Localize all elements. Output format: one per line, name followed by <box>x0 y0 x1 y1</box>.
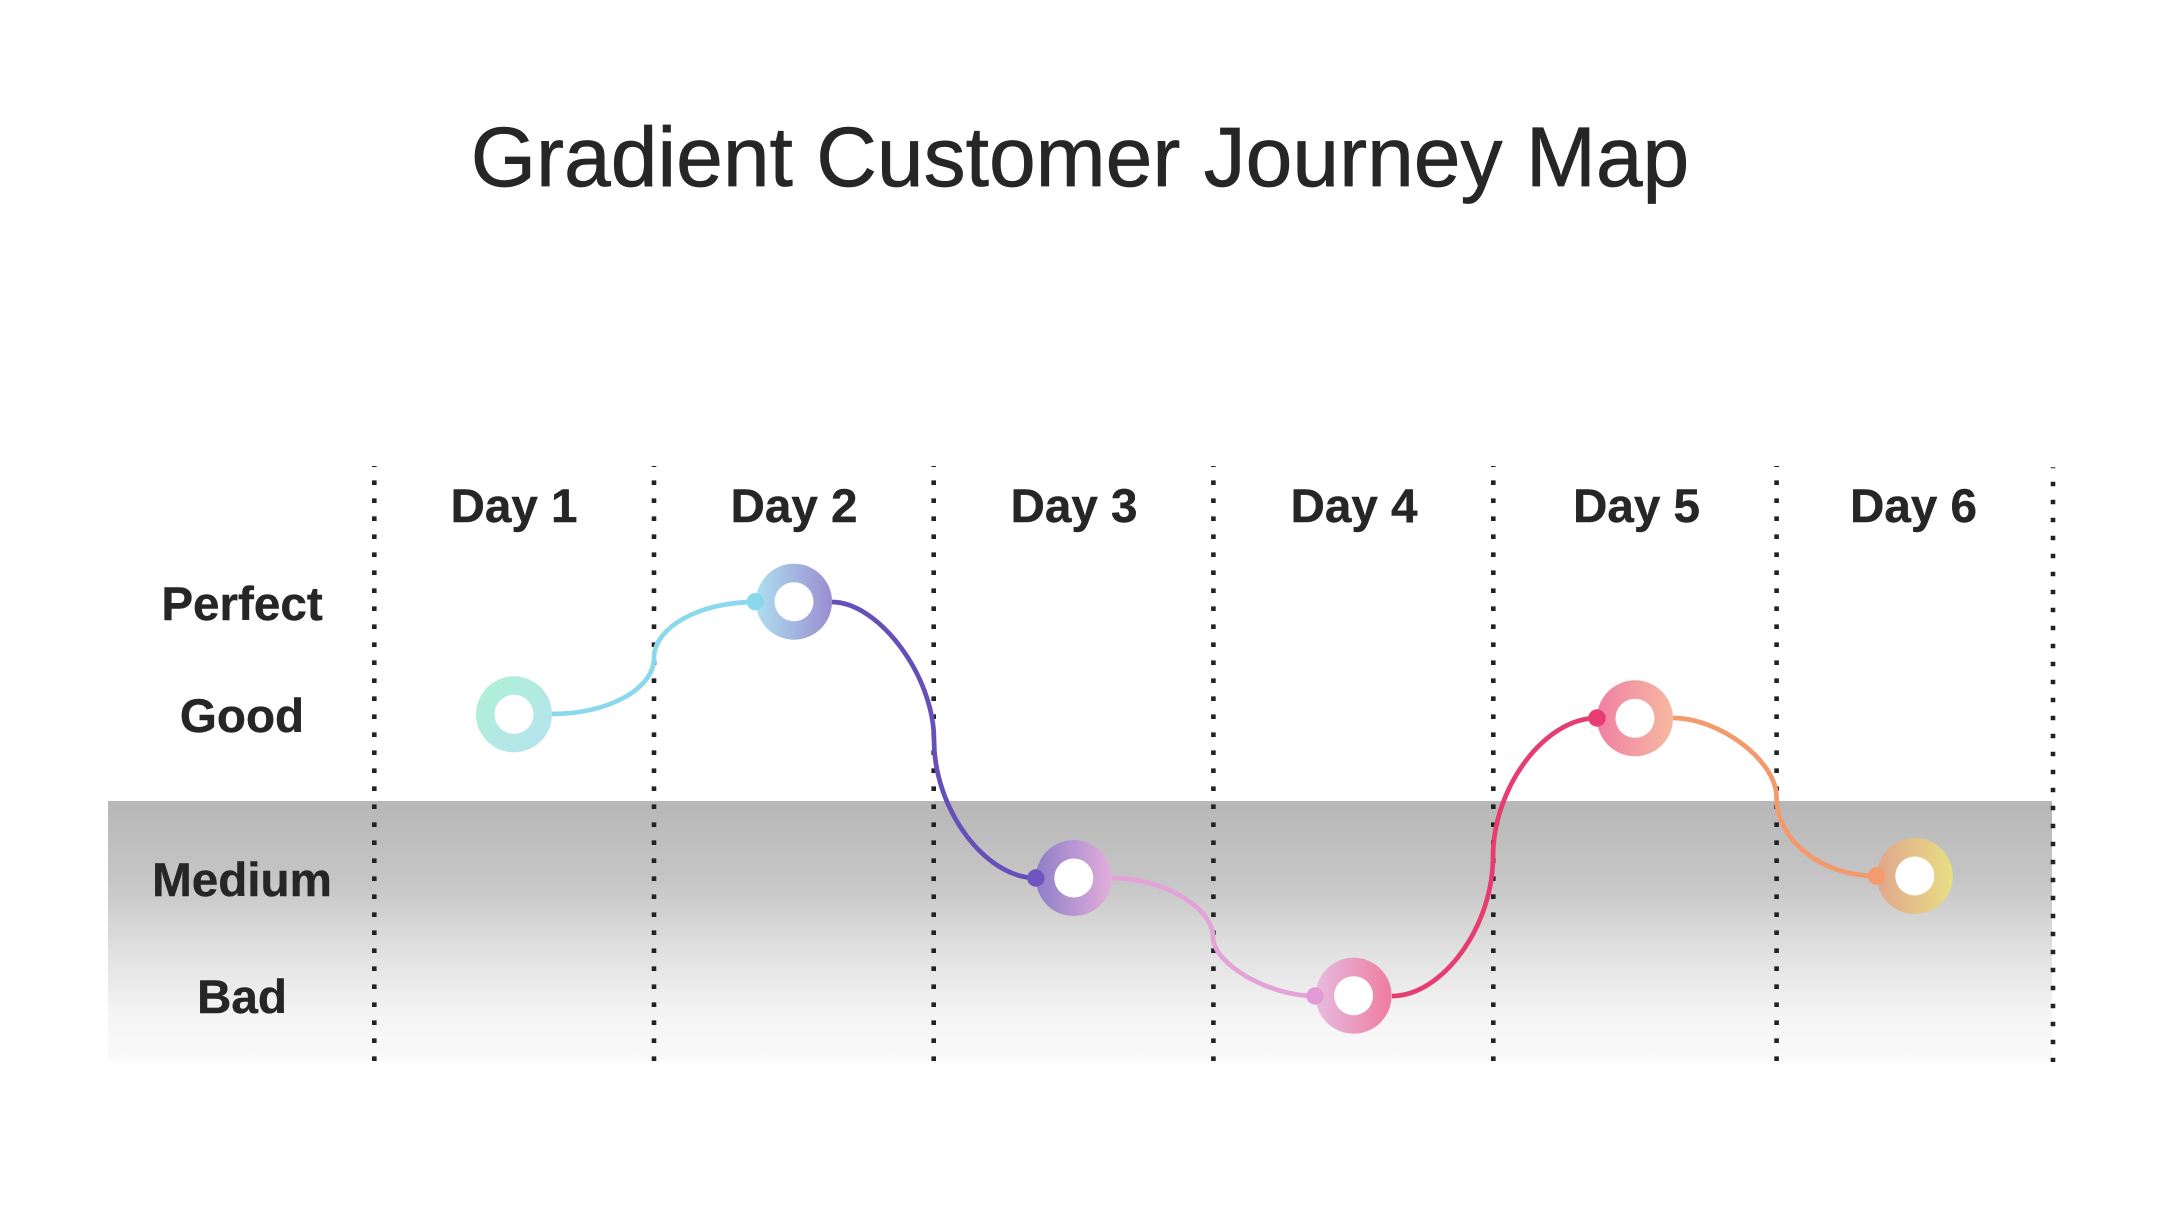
day headers: Day 4 <box>1290 480 1418 533</box>
node: day 5 good <box>1588 680 1673 756</box>
title: Gradient Customer Journey Map <box>471 110 1689 204</box>
node: day 1 good <box>476 676 552 752</box>
curve: day 1 to day 2 <box>552 602 755 714</box>
rating labels <box>152 578 332 1024</box>
node: day 6 medium <box>1868 838 1953 914</box>
curve: day 3 to day 4 <box>1112 878 1315 996</box>
curve: day 4 to day 5 <box>1392 718 1597 996</box>
gradient band: medium and bad zone <box>108 801 2052 1061</box>
rating labels: Bad <box>197 971 287 1024</box>
day headers: Day 6 <box>1850 480 1977 533</box>
node: day 4 bad <box>1306 958 1392 1034</box>
day headers: Day 2 <box>730 480 858 533</box>
day headers: Day 3 <box>1010 480 1138 533</box>
node: day 2 perfect <box>747 564 832 640</box>
rating labels: Medium <box>152 854 332 907</box>
node: day 3 medium <box>1027 840 1112 916</box>
day headers: Day 1 <box>450 480 578 533</box>
rating labels: Good <box>180 690 304 743</box>
curve: day 2 to day 3 <box>832 602 1036 878</box>
day headers <box>450 480 1977 533</box>
rating labels: Perfect <box>161 578 323 631</box>
day headers: Day 5 <box>1573 480 1700 533</box>
curve: day 5 to day 6 <box>1673 718 1876 876</box>
